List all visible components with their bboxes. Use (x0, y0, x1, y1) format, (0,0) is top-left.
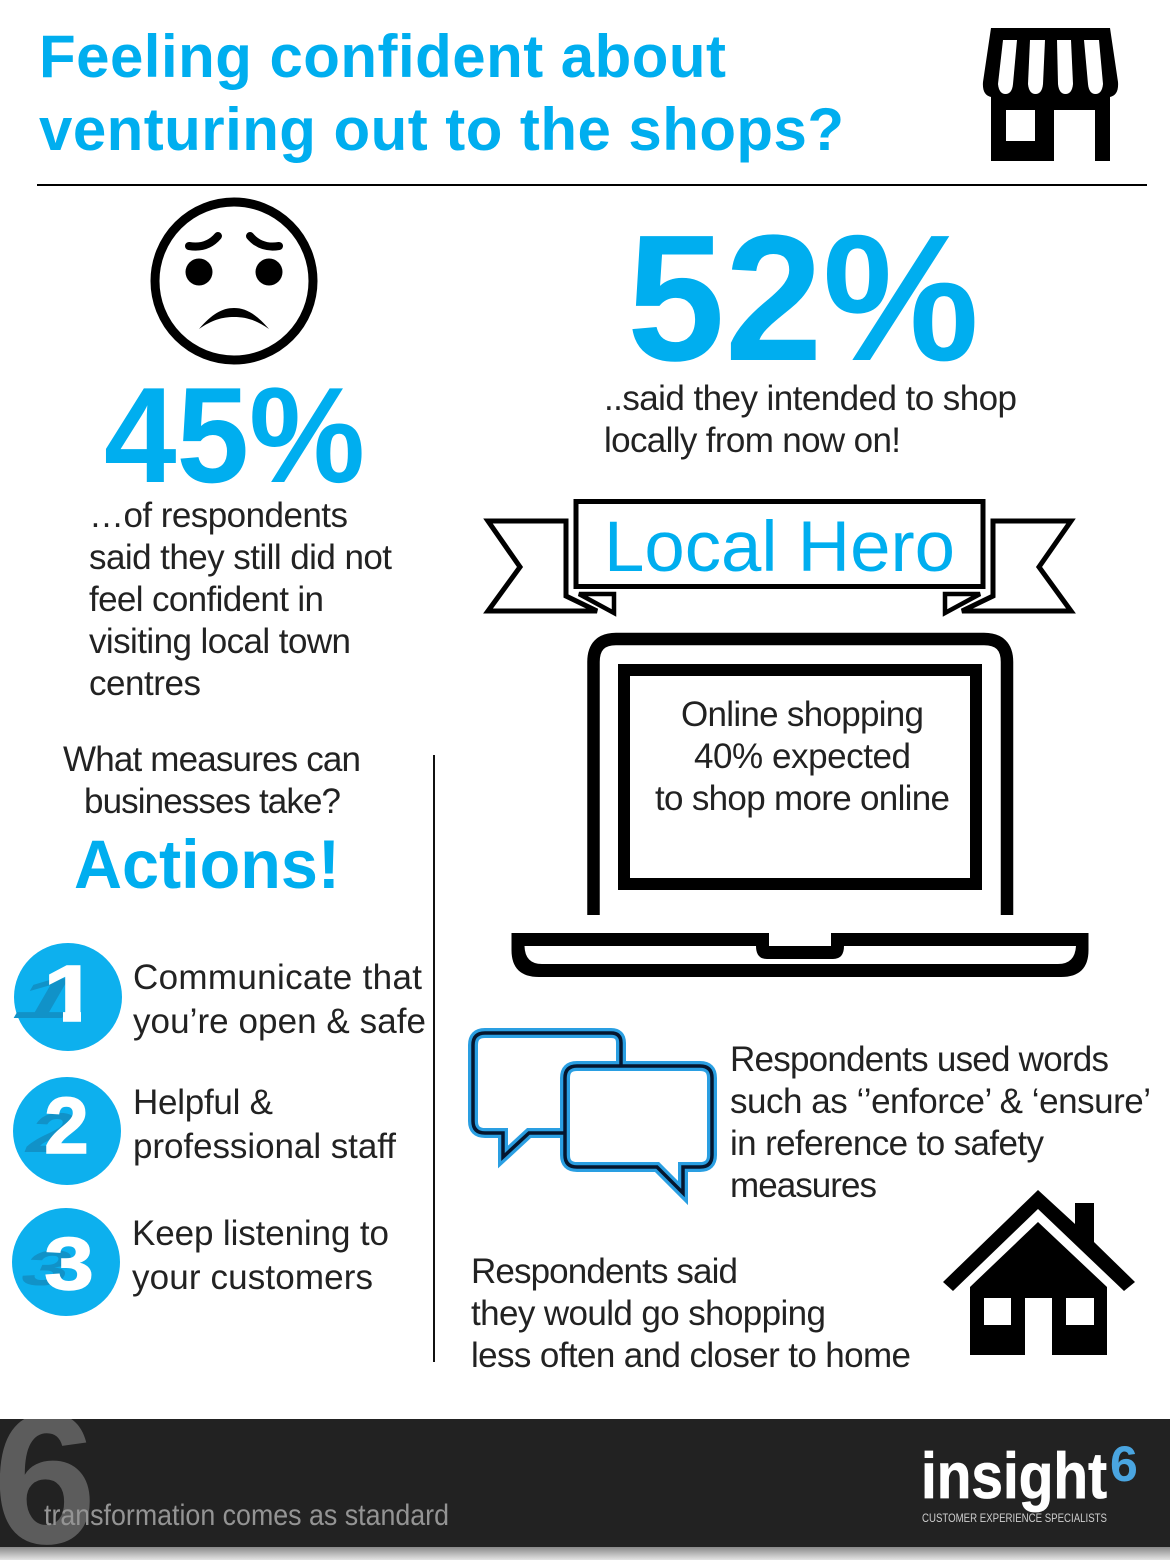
logo: insight6: 6 (1110, 1436, 1138, 1492)
action 1: 1 (0, 967, 95, 1031)
text: what measures: What measures can (63, 740, 361, 779)
text: 52 percent description (604, 379, 1017, 460)
action 2: Helpful & (133, 1083, 273, 1122)
title (39, 23, 844, 163)
text: 45 percent description: said they still did not (89, 538, 392, 577)
text: online shopping: 40% expected (694, 737, 911, 776)
text: closer to home: less often and closer to home (471, 1336, 911, 1375)
text: closer to home: they would go shopping (471, 1294, 826, 1333)
icon: shop (983, 28, 1118, 161)
text: online shopping (655, 695, 950, 818)
text: 52 percent description: locally from now on! (604, 421, 901, 460)
action 3: 3 (44, 1223, 94, 1305)
action 1: 1 (43, 948, 98, 1038)
action 2 (13, 1077, 396, 1185)
text: closer to home (471, 1252, 911, 1375)
action 2: professional staff (133, 1127, 396, 1166)
text: respondents used words: in reference to safety (730, 1124, 1044, 1163)
text: respondents used words (730, 1040, 1151, 1205)
text: 45 percent description: centres (89, 664, 201, 703)
text: 45 percent description: visiting local town (89, 622, 351, 661)
action 1 (0, 943, 426, 1051)
action 2: 2 (17, 1102, 86, 1165)
stat: 45 percent: 45% (104, 359, 365, 511)
banner: local hero (488, 502, 1071, 613)
stat: 52 percent: 52% (627, 198, 979, 399)
title: venturing out to the shops? (39, 96, 844, 163)
action 3 (12, 1208, 389, 1316)
text: 52 percent description: ..said they intended to shop (604, 379, 1017, 418)
text: respondents used words: Respondents used words (730, 1040, 1109, 1079)
title: Feeling confident about (39, 23, 726, 90)
icon: laptop (512, 639, 1088, 977)
logo: insight6: CUSTOMER EXPERIENCE SPECIALISTS (922, 1513, 1107, 1525)
text: 45 percent description: …of respondents (89, 496, 348, 535)
footer tagline: transformation comes as standard (44, 1499, 449, 1532)
text: respondents used words: measures (730, 1166, 877, 1205)
action 3: Keep listening to (132, 1214, 389, 1253)
text: closer to home: Respondents said (471, 1252, 738, 1291)
action 2: 2 (44, 1081, 89, 1170)
action 3: your customers (132, 1258, 373, 1297)
icon: house (943, 1190, 1135, 1355)
action 1: Communicate that (133, 958, 422, 997)
action 3: 3 (12, 1240, 83, 1296)
text: respondents used words: such as ‘’enforce’ & ‘ensure’ (730, 1082, 1151, 1121)
logo: insight6: insight (921, 1439, 1107, 1512)
text: what measures (63, 740, 361, 821)
heading: actions: Actions! (74, 826, 340, 903)
icon: worried face (155, 202, 313, 360)
text: online shopping: Online shopping (681, 695, 924, 734)
text: 45 percent description: feel confident in (89, 580, 324, 619)
text: online shopping: to shop more online (655, 779, 950, 818)
footer band (0, 1419, 1170, 1560)
banner: local hero: Local Hero (604, 508, 955, 587)
text: what measures: businesses take? (84, 782, 341, 821)
action 1: you’re open & safe (133, 1002, 426, 1041)
text: 45 percent description (89, 496, 392, 703)
icon: speech bubbles (473, 1033, 712, 1193)
